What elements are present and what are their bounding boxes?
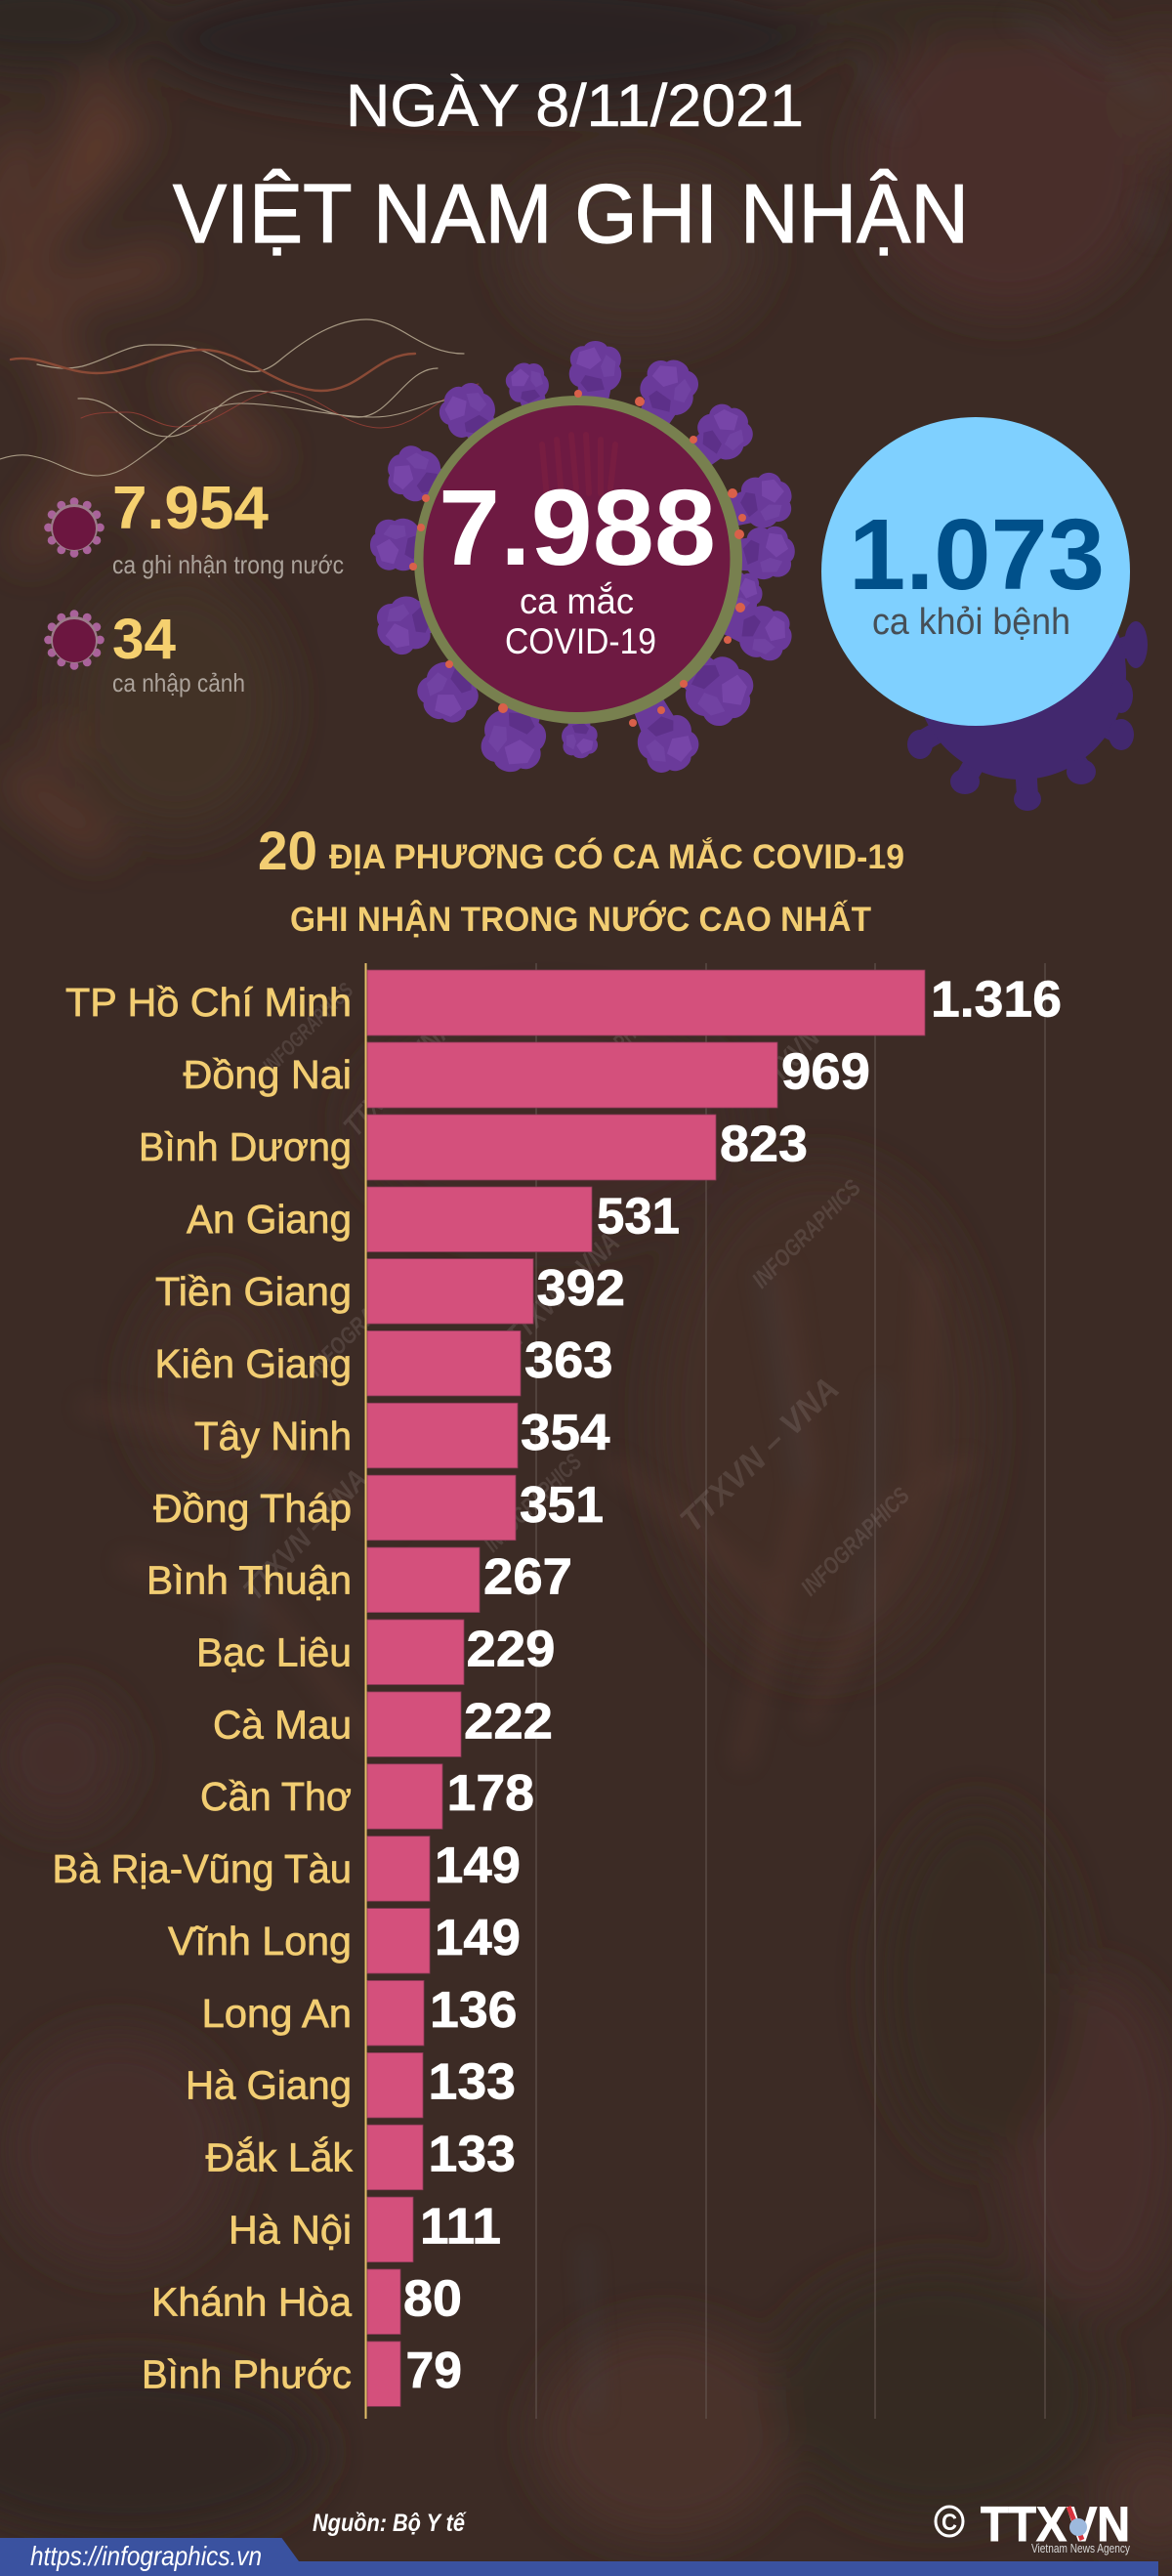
- watermarks: INFOGRAPHICS: [258, 978, 358, 1078]
- row: Tiền Giang: Tiền Giang: [155, 1269, 352, 1314]
- row: Bình Dương: 823: [720, 1116, 808, 1172]
- row: Bình Phước: [142, 2342, 462, 2406]
- row: Bình Phước: 79: [406, 2343, 462, 2399]
- logo: TTXVN: TTXVN: [981, 2497, 1130, 2552]
- row: Cần Thơ: [200, 1764, 534, 1829]
- watermarks: TTXVN – VNA: [237, 1463, 374, 1607]
- row: Tây Ninh: 354: [521, 1405, 610, 1461]
- row: Bình Thuận: [146, 1547, 572, 1613]
- logo: copyright symbol: [936, 2507, 963, 2536]
- row: Đồng Nai: 969: [781, 1043, 870, 1100]
- row: Hà Nội: [229, 2197, 501, 2262]
- row: Tây Ninh: [194, 1403, 610, 1468]
- row: Kiên Giang: 363: [524, 1332, 613, 1389]
- row: Bà Rịa-Vũng Tàu: Bà Rịa-Vũng Tàu: [53, 1846, 352, 1891]
- row: An Giang: [187, 1187, 680, 1252]
- watermarks: TTXVN – VNA: [753, 968, 875, 1099]
- row: Bạc Liêu: 229: [467, 1622, 555, 1678]
- stat: recovered number: 1.073: [849, 498, 1105, 611]
- logo: copyright symbol: C: [942, 2510, 957, 2536]
- row: An Giang: 531: [597, 1188, 680, 1245]
- stat: total cases number: 7.988: [439, 468, 716, 588]
- row: Tây Ninh: Tây Ninh: [194, 1414, 352, 1458]
- title: date line: NGÀY 8/11/2021: [346, 72, 804, 139]
- row: Đồng Tháp: [153, 1475, 604, 1541]
- axis: [365, 963, 367, 2419]
- watermarks: INFOGRAPHICS: [796, 1483, 915, 1601]
- row: Cà Mau: 222: [464, 1694, 553, 1751]
- row: Bình Phước: Bình Phước: [142, 2352, 352, 2397]
- watermarks: INFOGRAPHICS: [561, 1003, 659, 1108]
- row: Đồng Tháp: 351: [520, 1477, 604, 1534]
- row: Long An: 136: [430, 1982, 518, 2039]
- watermarks: [237, 968, 915, 1607]
- row: Cần Thơ: 178: [447, 1765, 534, 1822]
- footer URL: https://infographics.vn: [30, 2541, 262, 2571]
- row: Cà Mau: Cà Mau: [213, 1702, 352, 1747]
- row: Bình Dương: [139, 1115, 808, 1180]
- footer band: [0, 2538, 1158, 2576]
- watermarks: TTXVN – VNA: [338, 1012, 460, 1143]
- row: TP Hồ Chí Minh: TP Hồ Chí Minh: [65, 980, 352, 1025]
- row: Long An: [201, 1981, 518, 2046]
- chart heading line 1: ĐỊA PHƯƠNG CÓ CA MẮC COVID-19: [329, 837, 904, 876]
- recovered circle: [821, 417, 1130, 726]
- row: Hà Giang: [186, 2052, 516, 2118]
- row: Vĩnh Long: [168, 1909, 521, 1973]
- stat: domestic cases label: ca ghi nhận trong nước: [112, 550, 344, 579]
- row: Hà Nội: 111: [420, 2198, 501, 2255]
- watermarks: INFOGRAPHICS: [479, 1449, 587, 1557]
- row: Hà Giang: Hà Giang: [186, 2063, 352, 2108]
- row: Bình Dương: Bình Dương: [139, 1124, 352, 1169]
- watermarks: TTXVN – VNA: [500, 1227, 626, 1353]
- row: Tiền Giang: 392: [537, 1260, 625, 1317]
- stat: recovered label: ca khỏi bệnh: [872, 602, 1070, 643]
- stat: imported cases number: 34: [112, 608, 176, 671]
- icon: small virus imported: [44, 610, 105, 670]
- row: Kiên Giang: Kiên Giang: [154, 1341, 352, 1386]
- row: Hà Giang: 133: [428, 2053, 516, 2110]
- row: Đắk Lắk: Đắk Lắk: [205, 2135, 353, 2180]
- row: Đồng Nai: [184, 1042, 870, 1108]
- chart heading line 2: GHI NHẬN TRONG NƯỚC CAO NHẤT: [290, 900, 871, 939]
- logo: TTXVN: Vietnam News Agency: [1031, 2541, 1130, 2555]
- row: Bà Rịa-Vũng Tàu: [53, 1837, 521, 1901]
- watermarks: INFOGRAPHICS: [747, 1175, 866, 1293]
- chart gridlines: [536, 963, 1045, 2419]
- bar chart: [53, 963, 1062, 2419]
- row: Bạc Liêu: Bạc Liêu: [196, 1629, 352, 1674]
- row: Vĩnh Long: 149: [435, 1910, 521, 1966]
- row: Kiên Giang: [154, 1330, 613, 1396]
- row: Bình Thuận: 267: [483, 1549, 572, 1606]
- row: Cà Mau: [213, 1692, 553, 1756]
- row: Khánh Hòa: 80: [403, 2270, 462, 2327]
- source note: Nguồn: Bộ Y tế: [313, 2510, 467, 2537]
- row: Bạc Liêu: [196, 1620, 555, 1684]
- stat: total cases label line 1: ca mắc: [520, 581, 634, 621]
- row: Cần Thơ: Cần Thơ: [200, 1774, 352, 1819]
- icon: large coronavirus: [368, 338, 800, 782]
- row: Đồng Nai: Đồng Nai: [184, 1052, 352, 1097]
- row: Khánh Hòa: [151, 2269, 462, 2335]
- watermarks: INFOGRAPHICS: [303, 1263, 422, 1381]
- row: Tiền Giang: [155, 1259, 625, 1324]
- row: Khánh Hòa: Khánh Hòa: [151, 2280, 352, 2325]
- icon: small virus domestic: [44, 497, 105, 558]
- watermarks: TTXVN – VNA: [673, 1371, 847, 1540]
- row: An Giang: An Giang: [187, 1197, 352, 1242]
- title: main headline: VIỆT NAM GHI NHẬN: [173, 168, 969, 261]
- row: Bình Thuận: Bình Thuận: [146, 1557, 352, 1602]
- row: Long An: Long An: [201, 1991, 352, 2036]
- row: Vĩnh Long: Vĩnh Long: [168, 1919, 352, 1964]
- icon: purple virus behind recovered circle: [907, 569, 1148, 811]
- row: Đắk Lắk: [205, 2125, 516, 2190]
- row: Bà Rịa-Vũng Tàu: 149: [435, 1837, 521, 1894]
- stat: domestic cases number: 7.954: [112, 475, 270, 542]
- row: TP Hồ Chí Minh: 1.316: [931, 971, 1062, 1028]
- stat: imported cases label: ca nhập cảnh: [112, 668, 245, 697]
- chart heading number: 20: [258, 820, 317, 881]
- row: Hà Nội: Hà Nội: [229, 2208, 352, 2253]
- row: Đắk Lắk: 133: [428, 2126, 516, 2182]
- stat: total cases label line 2: COVID-19: [505, 621, 656, 661]
- row: Đồng Tháp: Đồng Tháp: [153, 1486, 352, 1531]
- row: TP Hồ Chí Minh: [65, 970, 1062, 1035]
- decorative wave lines: [0, 319, 479, 476]
